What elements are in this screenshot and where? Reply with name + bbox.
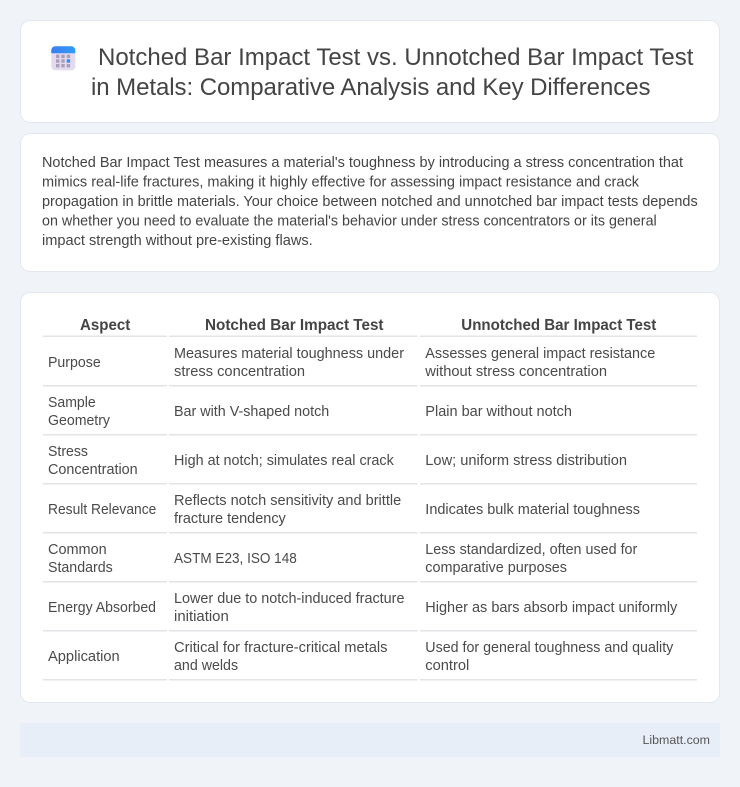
row: Energy Absorbed: Energy Absorbed [48,600,156,616]
row: Common Standards [43,542,697,582]
row: Sample Geometry [43,395,697,436]
row: Energy Absorbed [43,591,697,632]
header panel [20,20,720,123]
table panel [20,292,720,703]
row: Stress Concentration: Low; uniform stress distribution [425,453,627,469]
row: Purpose: stress concentration [174,364,305,380]
row: Sample Geometry: Sample [48,395,96,411]
row: Result Relevance: Indicates bulk material toughness [425,502,640,518]
row: Energy Absorbed: Higher as bars absorb impact uniformly [425,600,678,616]
row: Purpose: without stress concentration [424,364,607,380]
row: Energy Absorbed: Lower due to notch-induced fracture [174,591,404,607]
row: Stress Concentration: High at notch; simulates real crack [174,453,395,469]
table header: Notched Bar Impact Test [205,317,384,334]
intro text [42,155,698,249]
row: Common Standards: Less standardized, often used for [425,542,638,558]
footer bar [20,723,720,757]
table header: Unnotched Bar Impact Test [461,317,657,334]
title: in Metals: Comparative Analysis and Key Differences [91,74,650,101]
row: Application: and welds [174,658,238,674]
row: Result Relevance: Result Relevance [48,502,156,518]
row: Stress Concentration: Concentration [48,462,138,478]
row: Purpose [43,346,697,386]
row: Purpose: Purpose [48,355,101,371]
intro text: on whether you need to evaluate the material's behavior under stress concentrators or its general [42,214,657,230]
row: Stress Concentration [43,444,697,484]
row: Sample Geometry: Plain bar without notch [425,404,572,420]
icon: calendar [51,46,76,70]
intro panel [20,133,720,272]
row: Application: control [425,658,469,674]
table header: Aspect [80,317,131,334]
comparison table [43,317,697,680]
title: Notched Bar Impact Test vs. Unnotched Bar Impact Test [98,44,693,71]
row: Stress Concentration: Stress [48,444,88,460]
intro text: Notched Bar Impact Test measures a material's toughness by introducing a stress concentration that [42,155,683,171]
table header [43,317,697,337]
title [91,44,694,101]
row: Common Standards: Common [48,542,107,558]
row: Sample Geometry: Geometry [48,413,111,429]
intro text: impact strength without pre-existing flaws. [42,233,313,249]
row: Result Relevance: fracture tendency [174,511,287,527]
row: Application: Application [48,649,120,665]
row: Result Relevance [43,493,697,534]
row: Application [43,640,697,680]
row: Result Relevance: Reflects notch sensitivity and brittle [174,493,401,509]
row: Energy Absorbed: initiation [174,609,229,625]
row: Purpose: Assesses general impact resistance [425,346,655,362]
row: Sample Geometry: Bar with V-shaped notch [174,404,329,420]
row: Common Standards: Standards [48,560,113,576]
footer text: Libmatt.com [643,733,710,747]
row: Common Standards: ASTM E23, ISO 148 [174,551,297,567]
intro text: propagation in brittle materials. Your choice between notched and unnotched bar impact tests depends [42,194,698,210]
row: Purpose: Measures material toughness under [174,346,404,362]
row: Application: Used for general toughness and quality [425,640,674,656]
intro text: mimics real-life fractures, making it highly effective for assessing impact resistance and crack [42,174,640,190]
row: Common Standards: comparative purposes [425,560,567,576]
row: Application: Critical for fracture-critical metals [174,640,388,656]
